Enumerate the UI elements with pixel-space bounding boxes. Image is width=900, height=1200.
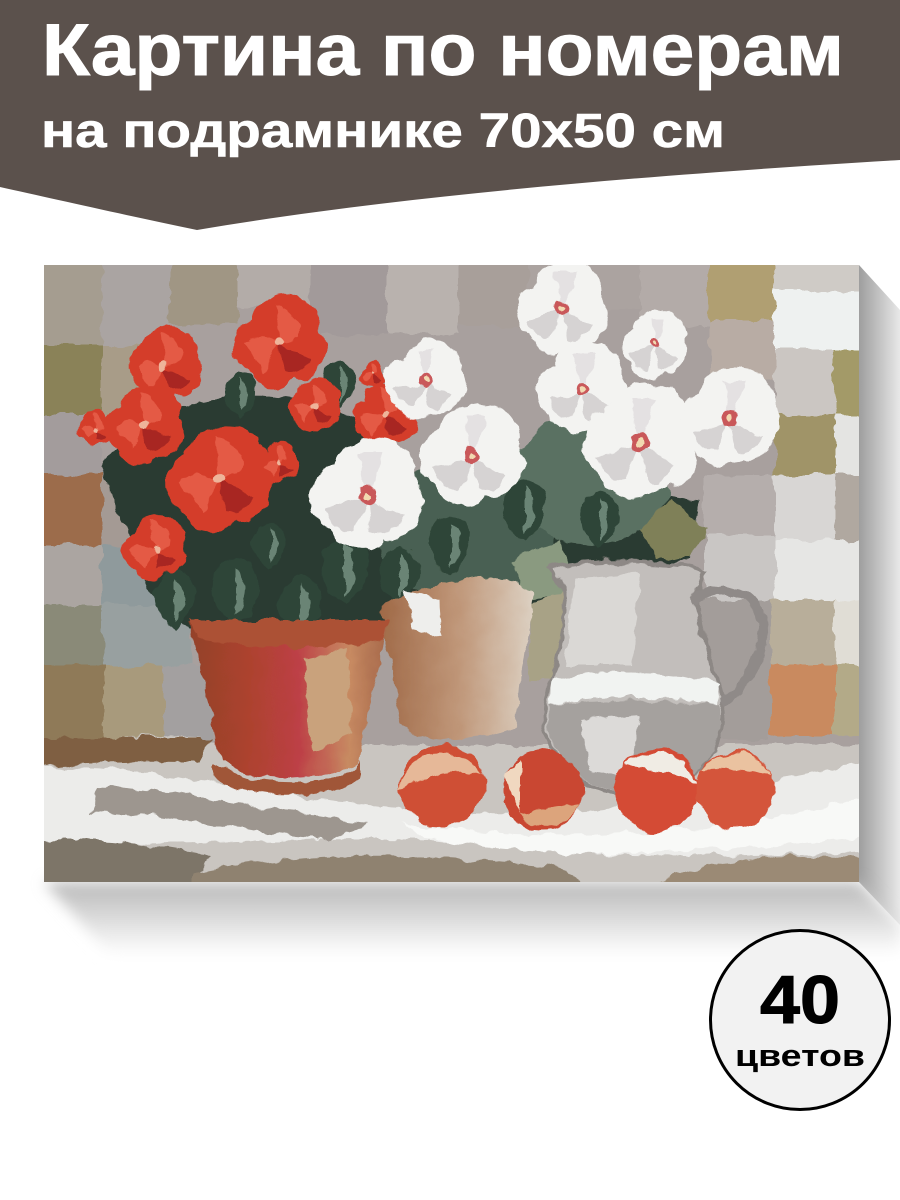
- painting: white leaf accent: [405, 590, 442, 638]
- canvas shadow: [44, 265, 900, 955]
- painting: still life with flowers: [30, 250, 875, 895]
- painting: table cloth: [30, 737, 875, 895]
- painting: peaches: [400, 743, 774, 832]
- painting: front clay pot: [190, 620, 388, 795]
- badge caption: цветов: [735, 1038, 865, 1073]
- painting: foliage: [100, 361, 708, 636]
- badge number: 40: [760, 962, 840, 1038]
- painting: glass jug: [545, 562, 762, 795]
- painting: white flowers: [311, 261, 779, 549]
- header banner: [0, 0, 900, 230]
- title: subtitle: на подрамнике 70х50 см: [41, 105, 725, 158]
- painting: checkered wall: [30, 250, 875, 745]
- painting: back clay pot: [380, 578, 535, 740]
- painting: red flowers: [78, 295, 417, 581]
- title: main heading: Картина по номерам: [42, 10, 844, 91]
- badge: 40 colours: [710, 930, 890, 1110]
